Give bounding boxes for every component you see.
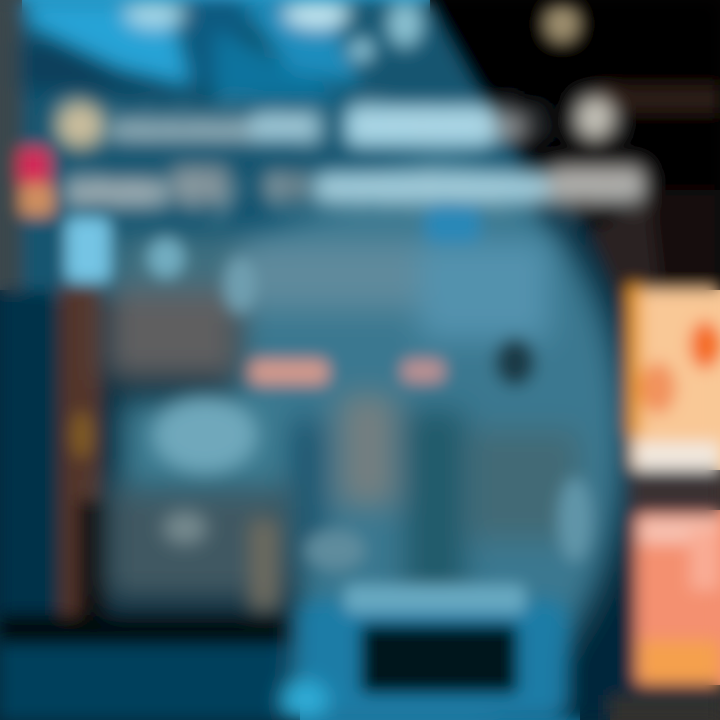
panel: central globe	[105, 150, 624, 720]
icon: red and orange badge	[18, 148, 54, 216]
panel: lower right shadow	[610, 695, 720, 720]
icon: distant light	[546, 7, 578, 41]
heading: title: Spending Trends in	[50, 85, 625, 150]
heading: title	[50, 85, 647, 225]
icon: blue bars	[66, 205, 480, 313]
panel: lower centre device	[281, 478, 592, 720]
heading: title: Party Landscape	[62, 160, 647, 225]
callouts: pink highlights	[250, 338, 535, 386]
panel: upper right orange card	[628, 285, 720, 470]
panel: lower left cube	[105, 397, 290, 610]
panel: lower right coral card	[636, 514, 720, 684]
panel: top sky-blue banner	[22, 0, 423, 100]
panel: left column	[0, 0, 300, 720]
divider: dark gap between cards	[630, 478, 720, 506]
